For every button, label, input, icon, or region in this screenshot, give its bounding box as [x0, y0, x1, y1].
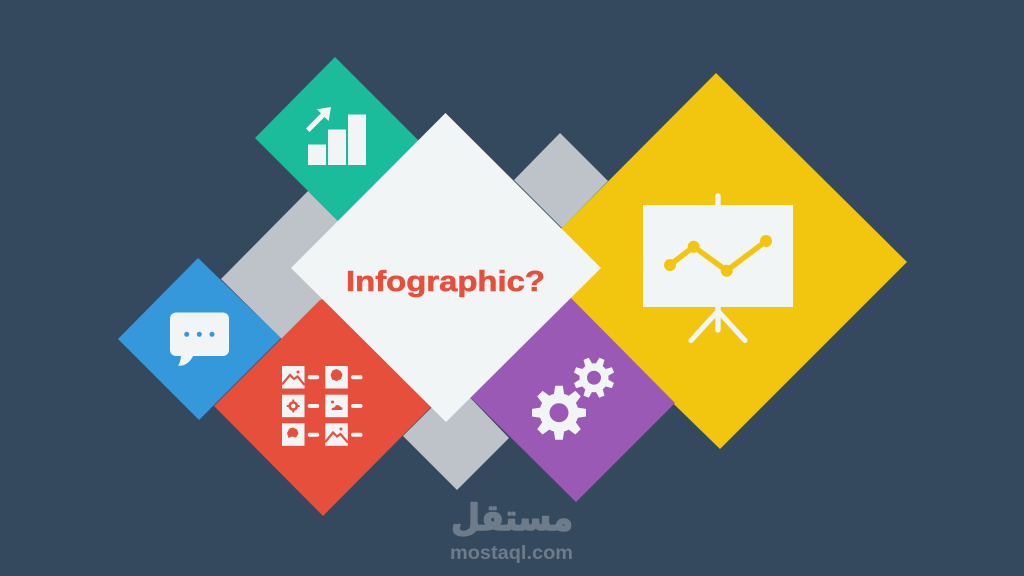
- panel: red diamond with image list: [214, 298, 432, 516]
- gray diamond: bottom connector: [403, 383, 509, 490]
- panel: teal diamond with growth chart: [255, 57, 420, 223]
- panel: central white diamond: [291, 113, 601, 422]
- gray diamond: left connector: [221, 191, 410, 380]
- line chart: [664, 235, 772, 277]
- logo: mostaql.com: mostaql.com: [450, 543, 573, 564]
- panel: purple diamond with gears: [466, 295, 675, 502]
- icon: presentation board: [643, 196, 793, 340]
- icon: image list: [282, 366, 362, 446]
- icon: small gear: [574, 357, 614, 398]
- panel: blue diamond with speech bubble: [118, 258, 281, 420]
- icon: bar chart with arrow: [306, 107, 366, 165]
- title: Infographic?: [346, 266, 545, 298]
- logo: Arabic wordmark: مستقل: [451, 498, 573, 539]
- gray diamond: top right connector: [514, 133, 608, 228]
- panel: yellow diamond with presentation board: [528, 73, 907, 449]
- icon: large gear: [532, 386, 586, 440]
- icon: speech bubble: [170, 312, 229, 366]
